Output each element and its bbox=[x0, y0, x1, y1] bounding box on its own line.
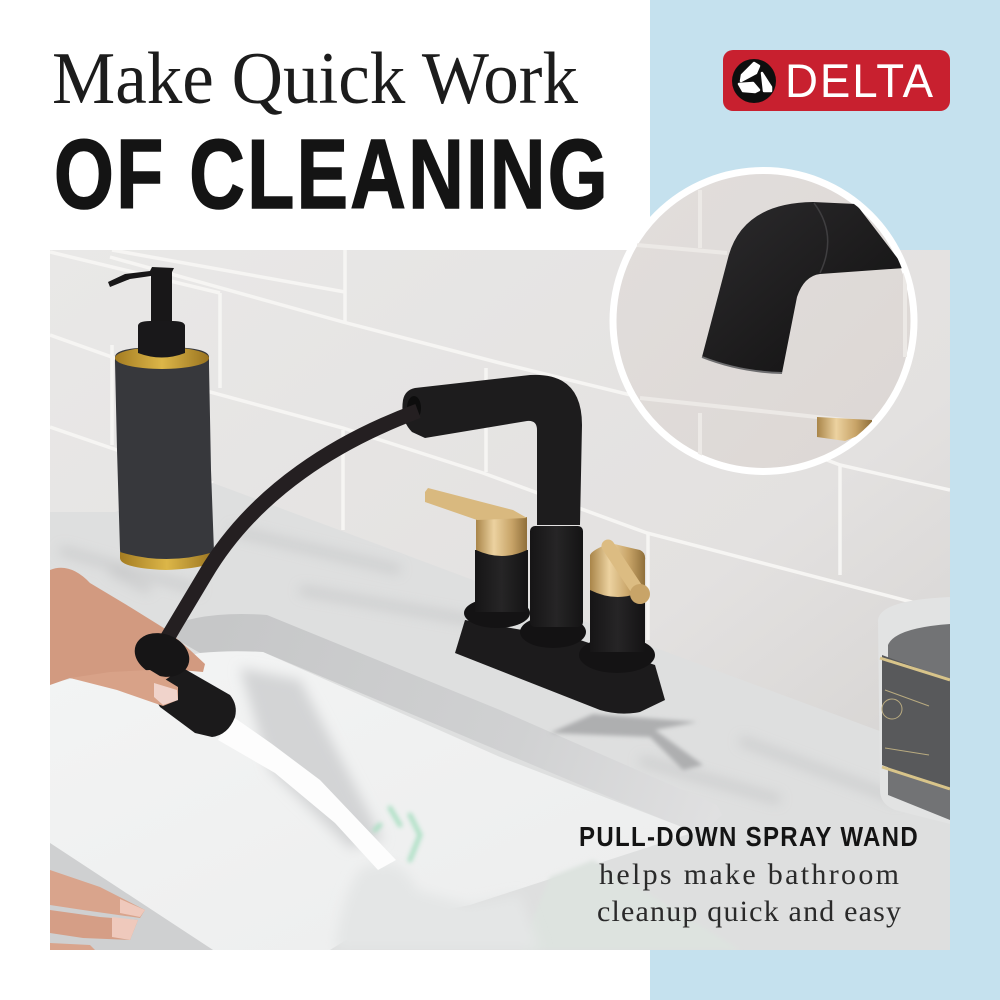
foam bbox=[342, 868, 455, 941]
logo: Delta bbox=[723, 50, 950, 111]
caption body line one: helps make bathroom bbox=[599, 858, 899, 891]
glass jar bbox=[878, 597, 950, 824]
photo: bathroom faucet scene bbox=[50, 250, 950, 950]
spout close-up bbox=[702, 202, 905, 373]
hand holding wand bbox=[50, 568, 205, 690]
sink basin bbox=[50, 651, 695, 950]
water stream bbox=[218, 716, 396, 870]
caption: spray wand bbox=[579, 821, 919, 928]
front marble left bbox=[50, 843, 213, 950]
heading: make quick work: Make Quick Work bbox=[52, 38, 578, 120]
right handle bbox=[579, 543, 655, 673]
caption body line two: cleanup quick and easy bbox=[597, 895, 901, 928]
faucet bbox=[402, 375, 665, 714]
panel: white background bbox=[0, 0, 650, 1000]
caption title: PULL-DOWN SPRAY WAND bbox=[579, 821, 919, 852]
basin inner shadow bbox=[240, 668, 383, 848]
green residue bbox=[375, 808, 420, 860]
wall tiles bbox=[50, 250, 950, 731]
soap dispenser bbox=[108, 267, 214, 570]
left handle bbox=[425, 488, 530, 628]
marble counter bbox=[50, 483, 950, 950]
paper reflection bbox=[550, 861, 598, 879]
countertop shadow bbox=[550, 714, 703, 770]
icon: delta emblem bbox=[732, 59, 776, 103]
faucet base bbox=[455, 620, 665, 714]
second hand bbox=[50, 870, 145, 950]
thumb bbox=[70, 670, 178, 706]
gold handle tip bbox=[817, 417, 872, 441]
logo wordmark: DELTA bbox=[785, 54, 935, 107]
inset: spout close-up circle bbox=[613, 170, 914, 472]
centre spout bbox=[402, 375, 586, 648]
pull-down hose and wand bbox=[129, 411, 418, 737]
panel: blue side background bbox=[650, 0, 1000, 1000]
heading: of cleaning: OF CLEANING bbox=[54, 119, 610, 229]
sink rim bevel bbox=[164, 614, 602, 788]
